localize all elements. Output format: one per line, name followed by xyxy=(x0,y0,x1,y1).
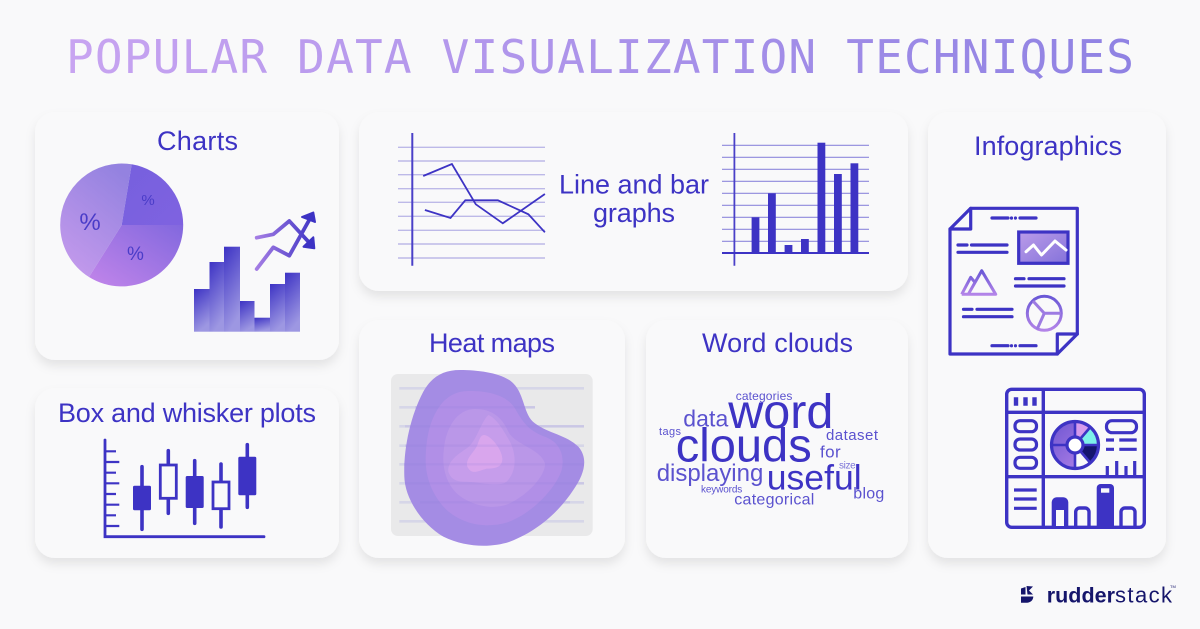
box plot xyxy=(105,440,264,537)
heading: word clouds: Word clouds xyxy=(702,328,853,358)
icon: logo mark xyxy=(1021,586,1033,603)
word cloud: data xyxy=(683,406,729,432)
heading: charts: Charts xyxy=(157,126,238,156)
logo: rudderstack: TM xyxy=(1170,584,1176,589)
bar graph xyxy=(722,133,869,266)
word cloud: tags xyxy=(659,426,682,438)
word cloud: blog xyxy=(853,485,884,502)
word cloud: word xyxy=(727,385,833,439)
title: POPULAR DATA VISUALIZATION TECHNIQUES xyxy=(66,30,1134,84)
panel: charts xyxy=(35,112,339,360)
panel: box and whisker plots xyxy=(35,388,339,558)
pie chart: % xyxy=(127,244,144,265)
pie chart: % xyxy=(79,209,101,236)
word cloud: categories xyxy=(736,389,792,403)
heading: heat maps: Heat maps xyxy=(429,328,555,358)
logo: rudderstack: stack xyxy=(1115,582,1173,607)
word cloud: displaying xyxy=(657,460,763,487)
pie chart: % xyxy=(141,192,155,209)
word cloud: useful xyxy=(767,457,862,497)
heading: box and whisker plots: Box and whisker plots xyxy=(58,398,316,428)
word cloud: for xyxy=(820,442,841,461)
panel: line and bar graphs xyxy=(359,112,908,291)
heading: line and bar graphs: graphs xyxy=(593,198,675,228)
donut chart xyxy=(1052,422,1098,468)
word cloud: clouds xyxy=(676,419,812,472)
icon: dashboard xyxy=(1007,389,1144,527)
heading: line and bar graphs: Line and bar xyxy=(559,169,709,199)
word cloud: categorical xyxy=(734,491,814,508)
panel: infographics xyxy=(928,112,1166,558)
word cloud: dataset xyxy=(826,427,879,444)
heat map xyxy=(391,370,593,546)
icon: infographic document xyxy=(950,208,1077,354)
panel: word clouds xyxy=(646,320,908,558)
logo: rudderstack xyxy=(1021,582,1176,607)
panel: heat maps xyxy=(359,320,625,558)
line graph xyxy=(398,133,545,266)
word cloud: keywords xyxy=(701,485,742,496)
pie chart xyxy=(60,163,183,286)
word cloud: size xyxy=(839,461,856,472)
heading: line and bar graphs xyxy=(559,169,709,228)
logo: rudderstack: rudder xyxy=(1047,583,1116,607)
word cloud xyxy=(657,385,884,508)
bar chart with trend arrows xyxy=(194,212,315,332)
heading: infographics: Infographics xyxy=(974,131,1122,161)
